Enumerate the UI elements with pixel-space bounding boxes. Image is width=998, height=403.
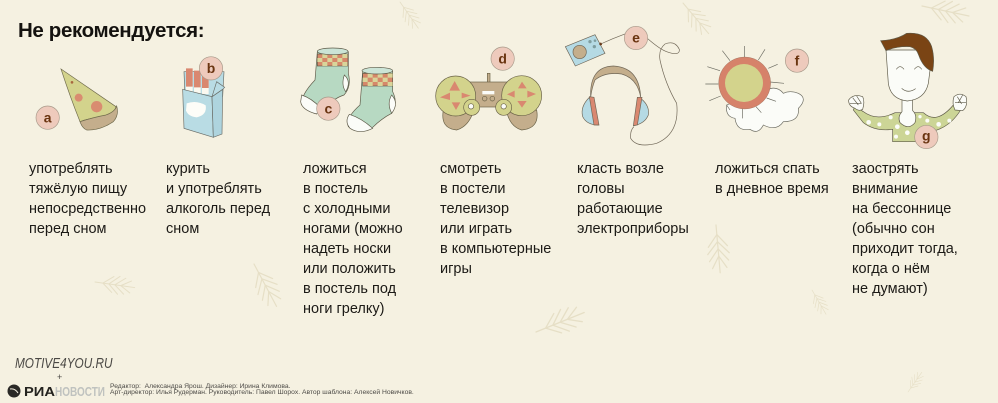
text d: или играть	[440, 221, 512, 237]
badge b: b	[207, 60, 215, 76]
text g	[852, 161, 958, 297]
badge g: g	[922, 128, 931, 144]
background sprig 2	[676, 0, 716, 39]
text g: внимание	[852, 181, 918, 197]
text g: (обычно сон	[852, 221, 935, 237]
text g: когда о нём	[852, 261, 930, 277]
text g: не думают)	[852, 281, 928, 297]
background sprig 5	[244, 259, 286, 311]
text a	[29, 161, 146, 237]
icon: socks	[301, 48, 395, 132]
icon: pizza	[61, 69, 117, 130]
text e: электроприборы	[577, 221, 689, 237]
text g: приходит тогда,	[852, 241, 958, 257]
logo: RIA Novosti	[8, 384, 105, 398]
credits: Редактор: Александра Ярош. Дизайнер: Ирина Климова.	[110, 383, 290, 390]
text b: алкоголь перед	[166, 201, 270, 217]
text d: телевизор	[440, 201, 509, 217]
text e: головы	[577, 181, 625, 197]
text d	[440, 161, 551, 277]
badge f	[785, 49, 809, 72]
text c: ложиться	[303, 161, 367, 177]
background sprig 7	[705, 224, 731, 274]
title: Не рекомендуется:	[18, 19, 204, 42]
credits	[110, 383, 414, 396]
icon: game controller	[436, 73, 542, 130]
text c: ногами (можно	[303, 221, 403, 237]
text f	[715, 161, 829, 197]
badge e	[624, 26, 648, 50]
text c: в постель под	[303, 281, 396, 297]
text b	[166, 161, 270, 237]
badge a: a	[44, 110, 52, 126]
text c: с холодными	[303, 201, 390, 217]
text b: сном	[166, 221, 199, 237]
text f: в дневное время	[715, 181, 829, 197]
text e: работающие	[577, 201, 663, 217]
text c: в постель	[303, 181, 368, 197]
background sprig 9	[904, 369, 926, 395]
badge d: d	[498, 50, 507, 66]
text b: и употреблять	[166, 181, 262, 197]
badge c: c	[324, 100, 332, 116]
background sprig 6	[532, 302, 589, 343]
credits: Арт-директор: Илья Рудерман. Руководитель: Павел Шорох. Автор шаблона: Алексей Новичков.	[110, 389, 414, 396]
badge f: f	[795, 52, 800, 68]
badge e: e	[632, 30, 640, 46]
icon: smiling man	[849, 33, 967, 142]
badge a	[36, 106, 59, 129]
badge g	[915, 125, 938, 149]
badge d	[491, 47, 514, 70]
text a: перед сном	[29, 221, 107, 237]
badge b	[199, 57, 223, 80]
text d: смотреть	[440, 161, 501, 177]
text e	[577, 161, 689, 237]
background sprig 4	[94, 273, 136, 296]
text a: употреблять	[29, 161, 113, 177]
text a: непосредственно	[29, 201, 146, 217]
text b: курить	[166, 161, 210, 177]
text g: на бессоннице	[852, 201, 951, 217]
icon: cigarette pack	[183, 68, 225, 137]
background sprig 8	[807, 287, 831, 317]
icon: headphones and player	[565, 34, 679, 145]
text a: тяжёлую пищу	[29, 181, 127, 197]
text g: заострять	[852, 161, 919, 177]
background sprig 3	[920, 0, 971, 27]
text d: в постели	[440, 181, 506, 197]
text d: игры	[440, 261, 472, 277]
text e: класть возле	[577, 161, 664, 177]
site name: MOTIVE4YOU.RU	[15, 355, 112, 372]
text d: в компьютерные	[440, 241, 551, 257]
background sprig 1	[394, 0, 424, 32]
text c	[303, 161, 403, 317]
text c: ноги грелку)	[303, 301, 384, 317]
plus sign: +	[57, 372, 62, 382]
text f: ложиться спать	[715, 161, 820, 177]
text c: надеть носки	[303, 241, 391, 257]
text c: или положить	[303, 261, 396, 277]
icon: sun and cloud	[705, 46, 803, 131]
badge c	[317, 97, 340, 120]
